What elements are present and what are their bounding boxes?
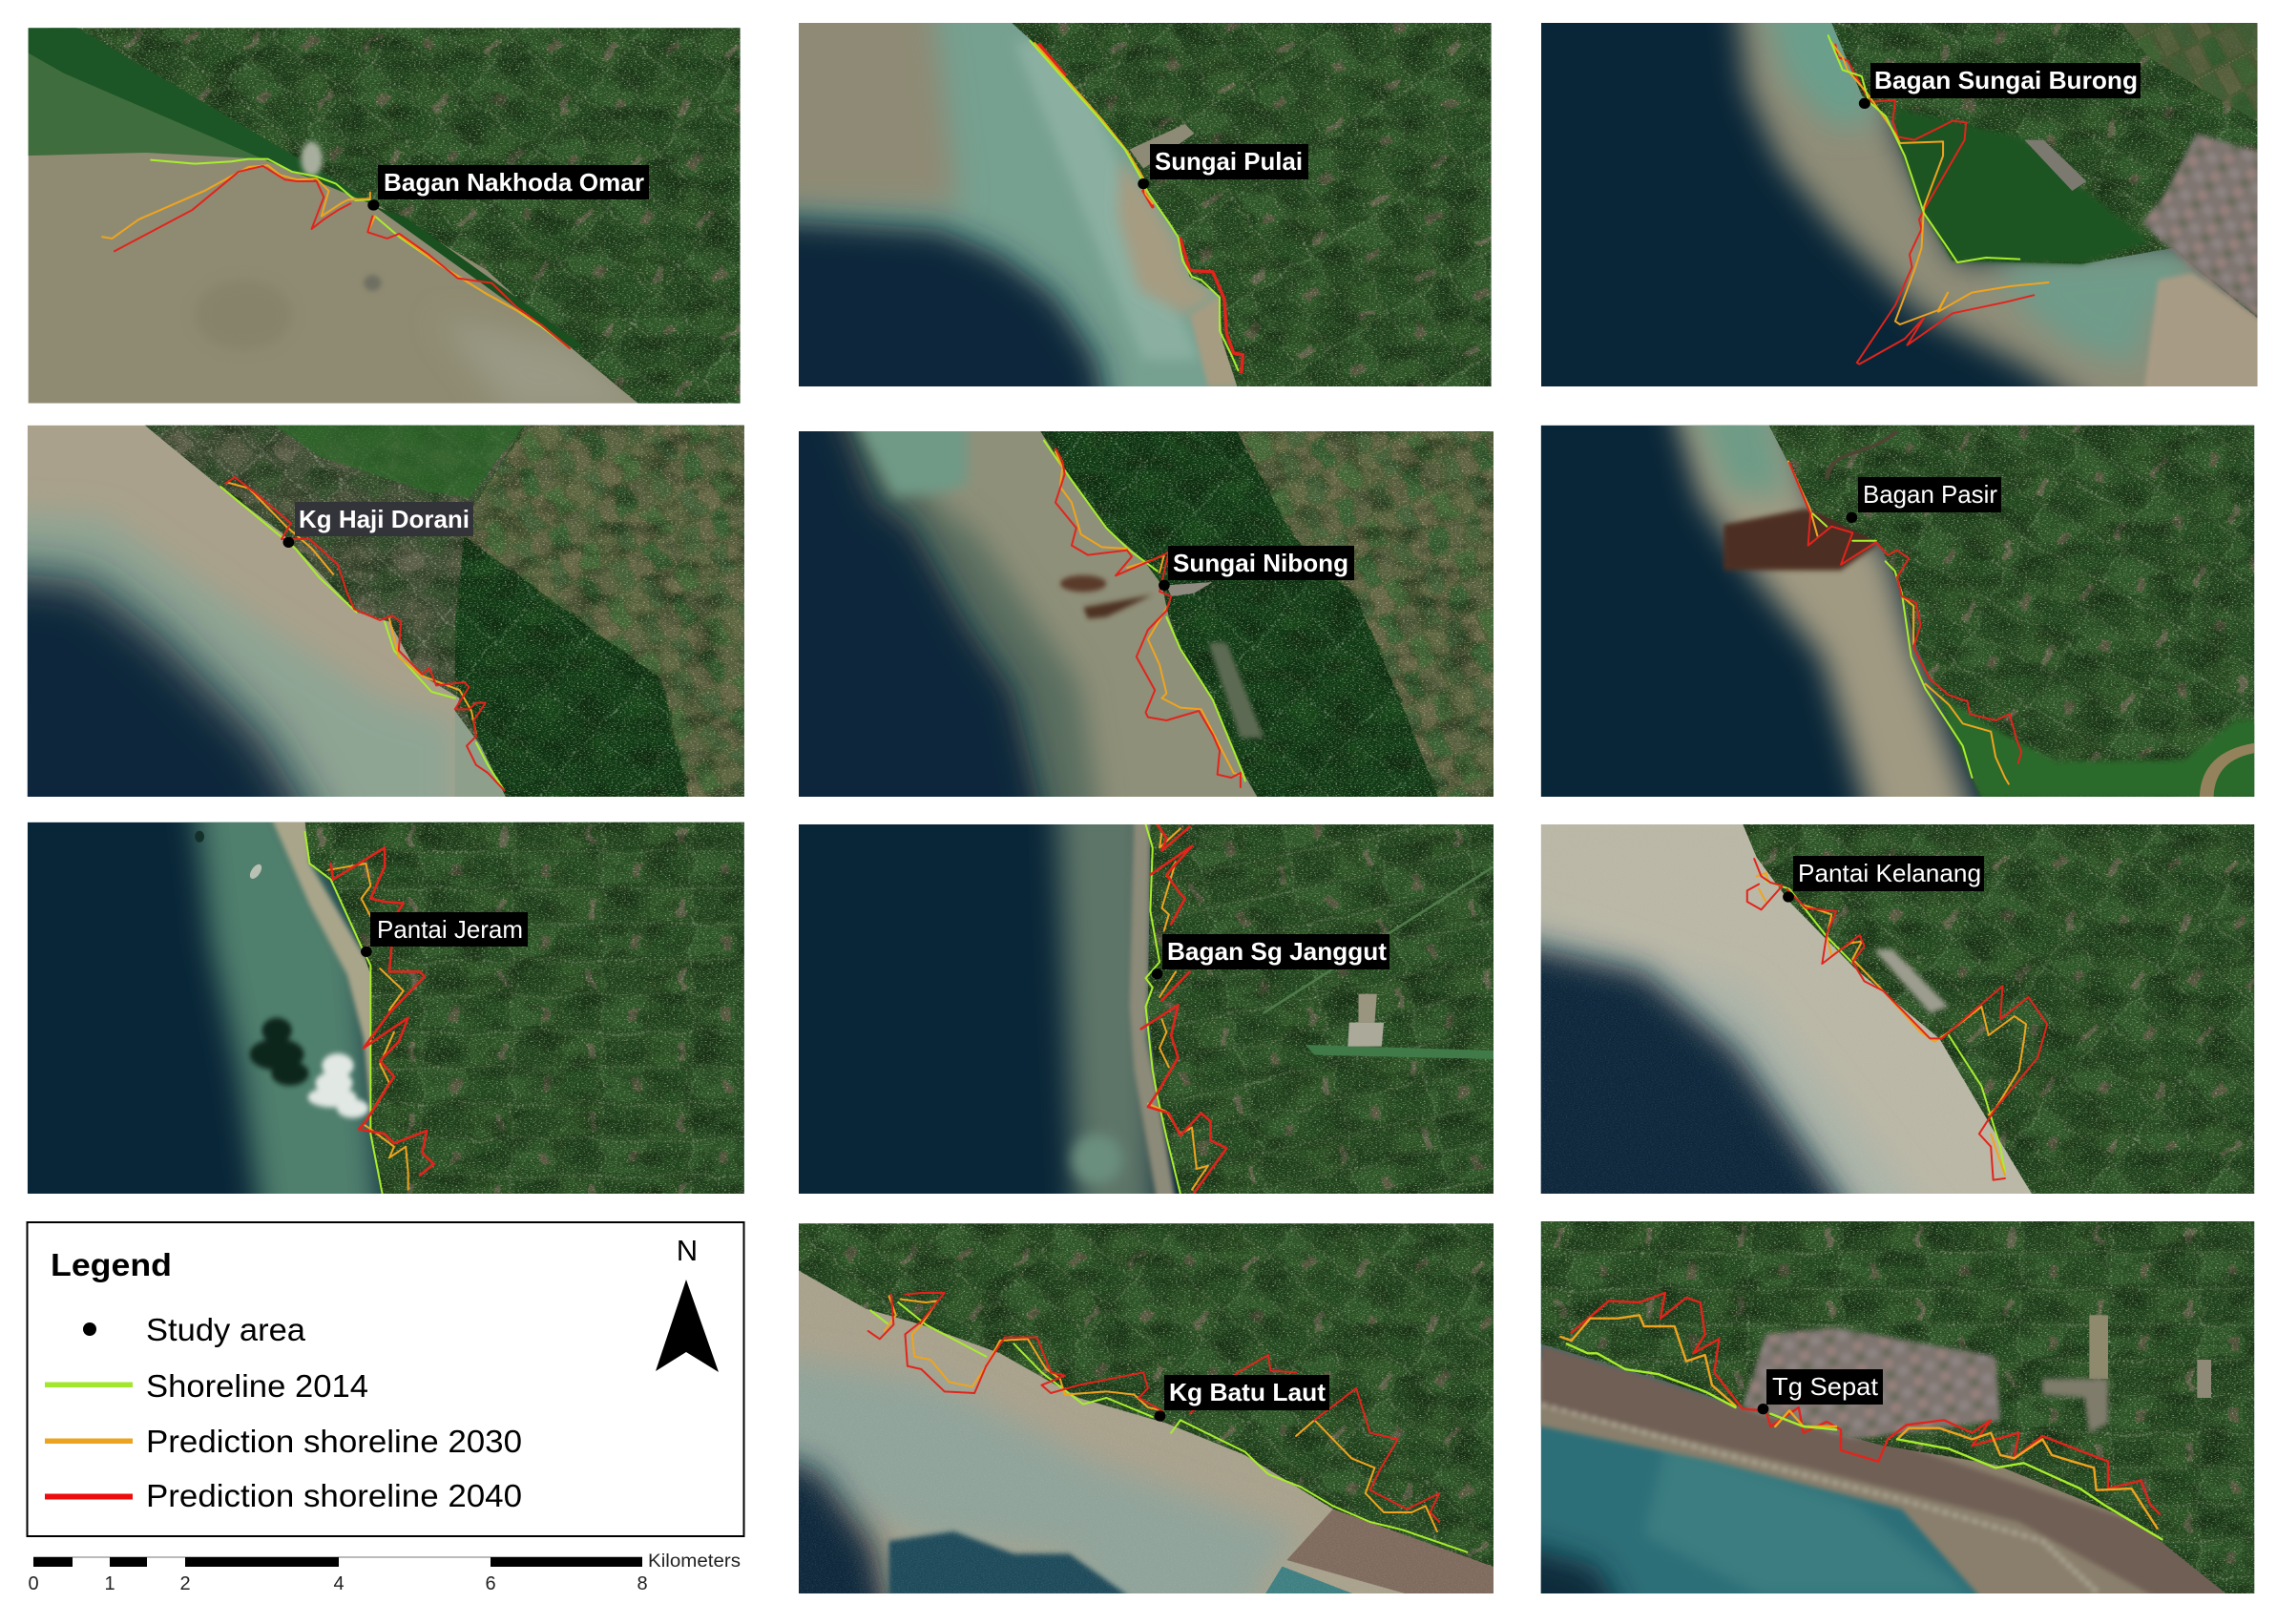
prediction shoreline 2040 (115, 166, 570, 348)
cloud (308, 1053, 368, 1118)
label: Pantai Jeram: Pantai Jeram (377, 915, 523, 944)
shoreline 2040 (1747, 859, 2047, 1180)
shoreline 2030 (228, 483, 476, 733)
shoreline 2030 (1560, 1315, 2158, 1529)
shoreline 2030 (1788, 461, 2009, 784)
shoreline 2040 (1055, 448, 1241, 787)
satellite map with shorelines (1540, 824, 2254, 1194)
shoreline 2014 (220, 487, 504, 790)
prediction shoreline 2030 (1034, 43, 1153, 203)
satellite map with shorelines (1541, 23, 2258, 386)
label: Pantai Kelanang: Pantai Kelanang (1798, 859, 1981, 887)
satellite map with shorelines (799, 23, 1492, 386)
label: Sungai Nibong: Sungai Nibong (1173, 549, 1348, 577)
label: Tg Sepat: Tg Sepat (1772, 1372, 1879, 1401)
shoreline 2040 (225, 477, 504, 790)
satellite map with shorelines (1540, 1221, 2254, 1593)
label: Bagan Sungai Burong: Bagan Sungai Burong (1874, 66, 2138, 94)
satellite map with shorelines (799, 824, 1494, 1194)
legend item: prediction shoreline 2040: Prediction shoreline 2040 (146, 1478, 522, 1513)
scale bar (28, 1551, 741, 1594)
north arrow (656, 1234, 719, 1372)
study area dot (1155, 1410, 1165, 1422)
scale bar: 0 (28, 1573, 39, 1594)
label: Bagan Sg Janggut: Bagan Sg Janggut (1167, 937, 1387, 966)
prediction shoreline 2040 (1039, 45, 1243, 372)
scale bar: 8 (637, 1573, 648, 1594)
map panel: Bagan Nakhoda Omar (25, 26, 745, 413)
map panel: Kg Batu Laut (690, 1222, 1497, 1624)
shoreline 2040 (868, 1293, 1439, 1522)
map panel: Sungai Nibong (690, 356, 1497, 865)
shoreline 2040 (1835, 45, 2034, 364)
river meander (2206, 747, 2258, 800)
shoreline 2014 (1813, 513, 1973, 778)
shoreline 2040 (1572, 1293, 2160, 1514)
satellite map with shorelines (1540, 426, 2254, 797)
shoreline 2030 (1055, 451, 1243, 776)
shoreline 2030 (1148, 828, 1208, 1190)
map panel: Pantai Jeram (28, 784, 748, 1261)
scale bar: 2 (179, 1573, 191, 1594)
dark reef blotch (250, 1018, 309, 1086)
satellite map with shorelines (27, 822, 744, 1194)
map panel: Bagan Sg Janggut (799, 784, 1497, 1261)
north arrow: N (677, 1234, 698, 1267)
map panel: Tg Sepat (1433, 1219, 2277, 1624)
scale bar: Kilometers (648, 1551, 741, 1572)
legend item: shoreline 2014 (45, 1368, 368, 1404)
shoreline 2014 (1567, 1343, 2162, 1539)
shoreline 2040 (1141, 824, 1226, 1193)
shoreline 2014 (1828, 35, 2019, 262)
map panel: Kg Haji Dorani (0, 424, 748, 861)
legend box (27, 1222, 744, 1536)
study area dot (367, 199, 379, 211)
study area dot (282, 537, 294, 548)
study area dot (1859, 98, 1870, 109)
map panel: Bagan Pasir (1541, 384, 2258, 861)
shoreline 2014 (870, 1302, 1467, 1552)
scale bar: 6 (485, 1573, 496, 1594)
shoreline 2014 (1044, 441, 1245, 781)
prediction shoreline 2030 (102, 165, 570, 348)
study area dot (1152, 968, 1162, 979)
shoreline 2040 (331, 847, 434, 1176)
shoreline 2040 (1789, 463, 2021, 763)
study area dot (1758, 1404, 1768, 1414)
legend item: prediction shoreline 2030: Prediction shoreline 2030 (146, 1424, 522, 1459)
shoreline 2014 (1765, 881, 2005, 1172)
legend item: study area: Study area (146, 1312, 306, 1347)
scale bar: 4 (333, 1573, 345, 1594)
shoreline 2014 (305, 832, 383, 1194)
shoreline 2030 (1757, 873, 2026, 1176)
map panel: Sungai Pulai (690, 0, 1494, 455)
shoreline 2030 (885, 1296, 1437, 1531)
legend item: study area (83, 1312, 306, 1347)
study area dot (1138, 178, 1149, 189)
legend item: shoreline 2014: Shoreline 2014 (146, 1368, 368, 1404)
legend title: Legend (51, 1247, 172, 1282)
shoreline 2014 (151, 159, 570, 348)
label: Sungai Pulai: Sungai Pulai (1155, 147, 1303, 176)
map panel: Bagan Sungai Burong (1541, 0, 2273, 446)
shoreline 2014 (1146, 824, 1180, 1194)
shoreline 2014 (1030, 41, 1238, 370)
map panel: Pantai Kelanang (1433, 823, 2258, 1261)
study area dot (361, 947, 372, 957)
label: Kg Batu Laut: Kg Batu Laut (1169, 1378, 1326, 1406)
shoreline 2030 (328, 864, 408, 1190)
label: Bagan Pasir: Bagan Pasir (1863, 480, 1997, 509)
study area dot (1159, 580, 1170, 591)
study area dot (1846, 512, 1857, 523)
satellite map with shorelines (799, 1223, 1494, 1593)
study area dot (1783, 891, 1794, 903)
scale bar: 1 (104, 1573, 115, 1594)
label: Kg Haji Dorani: Kg Haji Dorani (299, 505, 470, 533)
satellite map with shorelines (799, 431, 1494, 797)
satellite map with shorelines (27, 426, 744, 797)
label: Bagan Nakhoda Omar: Bagan Nakhoda Omar (384, 168, 644, 197)
shoreline 2030 (1830, 41, 2048, 324)
satellite map with shorelines (29, 28, 741, 404)
